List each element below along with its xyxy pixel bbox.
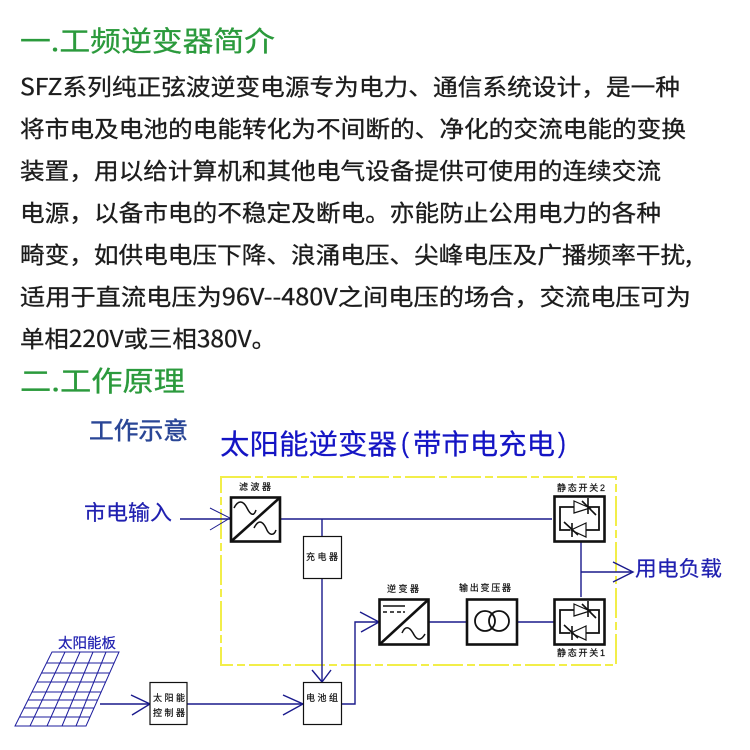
component: inverter	[380, 583, 428, 644]
diagram title: (	[401, 427, 410, 458]
icon: solar panel	[15, 652, 119, 726]
component: static switch 2	[554, 482, 605, 542]
label: solar panel: 太阳能板	[58, 635, 116, 651]
component: filter: 滤波器	[239, 481, 271, 492]
text block: introduction body: SFZ系列纯正弦波逆变电源专为电力、通信系统设计 ，是一种	[20, 68, 680, 102]
component: charger: 充电器	[306, 551, 338, 562]
component: solar controller: 太阳能	[153, 692, 185, 703]
component: static switch 1	[554, 600, 605, 658]
connection wires	[100, 519, 632, 704]
heading: introduction: 一.工频逆变器简介	[20, 20, 275, 60]
component: solar controller: 控制器	[153, 707, 185, 718]
component: output transformer: 输出变压器	[459, 582, 511, 593]
component: inverter: 逆变器	[387, 583, 419, 594]
component: filter	[231, 481, 280, 542]
component: output transformer	[459, 582, 517, 644]
diagram title: 太阳能逆变器	[220, 429, 397, 460]
component: static switch 2: 静态开关2	[557, 482, 605, 493]
label: working diagram: 工作示意	[89, 418, 188, 445]
arrowheads	[131, 508, 633, 715]
label: mains input: 市电输入	[84, 502, 172, 525]
text block: introduction body: 装置，用以给计算机和其他电气设备提供可使用的连续交流	[20, 152, 661, 186]
heading: working principle: 二.工作原理	[20, 360, 185, 400]
label: load: 用电负载	[635, 558, 722, 581]
component: static switch 1: 静态开关1	[557, 647, 605, 658]
component: battery pack: 电池组	[306, 692, 338, 703]
text block: introduction body: 单相220V或三相380V。	[20, 320, 276, 354]
text block: introduction body: 畸变，如供电电压下降、浪涌电压、尖峰电压及广播频率干扰,	[20, 236, 692, 270]
text block: introduction body: 电源，以备市电的不稳定及断电。亦能防止公用电力的各种	[20, 194, 661, 228]
text block: introduction body	[20, 68, 692, 354]
diagram title	[220, 427, 566, 460]
text block: introduction body: 将市电及电池的电能转化为不间断的、净化的交流电能的变换	[20, 110, 686, 144]
component: charger	[304, 536, 342, 578]
component: solar controller	[150, 682, 187, 724]
component: battery pack	[304, 682, 342, 724]
yellow dashed boundary	[221, 477, 616, 665]
diagram title: )	[558, 427, 566, 458]
text block: introduction body: 适用于直流电压为96V--480V之间电压的场合 ，交流电压可为	[20, 278, 691, 312]
diagram title: 带市电充电	[413, 429, 555, 460]
